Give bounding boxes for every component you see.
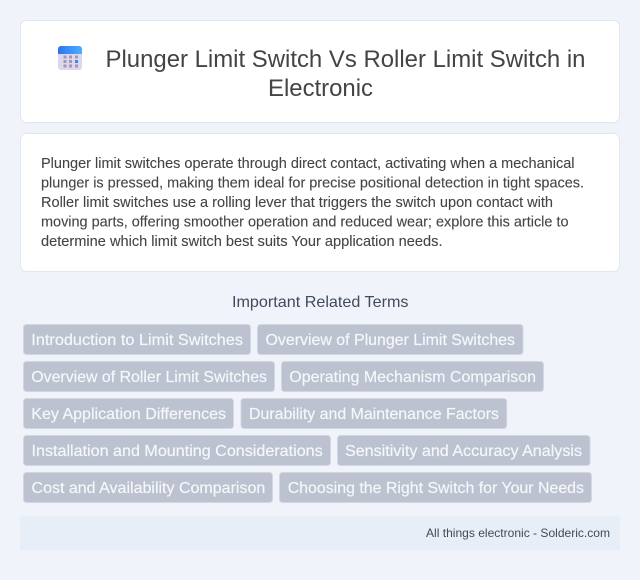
- tag: Choosing the Right Switch for Your Needs: [288, 480, 584, 497]
- tag: [282, 362, 544, 392]
- tag: Operating Mechanism Comparison: [289, 369, 536, 386]
- tag: [24, 436, 330, 466]
- tag: Overview of Plunger Limit Switches: [266, 332, 515, 349]
- tag: [338, 436, 590, 466]
- tag: Key Application Differences: [31, 406, 226, 423]
- tag: [280, 472, 592, 502]
- tag: Installation and Mounting Considerations: [32, 443, 323, 460]
- tag: Sensitivity and Accuracy Analysis: [345, 443, 582, 460]
- description text: moving parts, offering smoother operation and reduced wear; explore this article to: [41, 214, 568, 230]
- tag: Cost and Availability Comparison: [32, 480, 265, 497]
- tag: [24, 398, 234, 428]
- footer: All things electronic - Solderic.com: [426, 526, 610, 540]
- description text: Roller limit switches use a rolling lever that triggers the switch upon contact with: [41, 195, 553, 211]
- tag: Introduction to Limit Switches: [31, 332, 243, 349]
- tag: Durability and Maintenance Factors: [249, 406, 499, 423]
- tag list: [24, 324, 592, 502]
- icon: calendar: [58, 46, 82, 70]
- panel: header: [20, 20, 620, 122]
- heading: important related terms: Important Related Terms: [232, 294, 408, 311]
- tag: Overview of Roller Limit Switches: [31, 369, 267, 386]
- tag: [24, 362, 274, 392]
- description text: Plunger limit switches operate through direct contact, activating when a mechanical: [41, 156, 574, 172]
- tag: [258, 324, 523, 354]
- footer: [20, 516, 620, 550]
- title: Plunger Limit Switch Vs Roller Limit Switch in: [106, 46, 586, 73]
- title: [106, 46, 586, 102]
- title: Electronic: [268, 75, 373, 102]
- description text: plunger is pressed, making them ideal for precise positional detection in tight spaces.: [41, 176, 584, 192]
- description text: determine which limit switch best suits Your application needs.: [41, 234, 442, 250]
- tag: [24, 324, 250, 354]
- tag: [24, 472, 272, 502]
- tag: [241, 398, 507, 428]
- description text: [41, 156, 584, 250]
- panel: description: [20, 134, 620, 272]
